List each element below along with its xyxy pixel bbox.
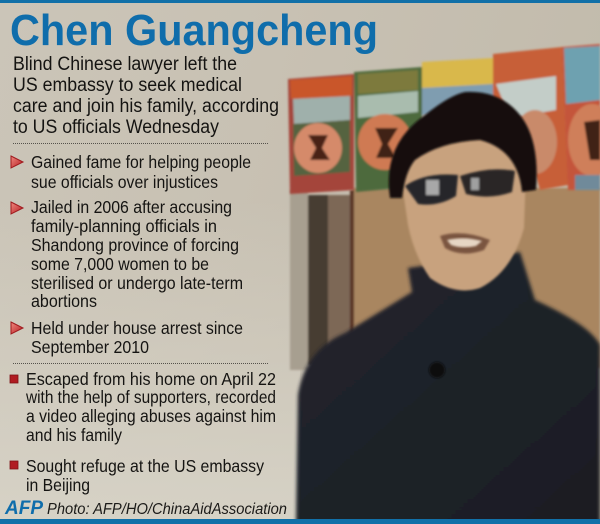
bullet: refuge: Sought refuge at the US embassy [26, 456, 264, 476]
intro text [13, 54, 279, 138]
bullet: jailed: Shandong province of forcing [31, 235, 239, 255]
bullet: refuge: in Beijing [26, 475, 90, 495]
face [400, 130, 526, 290]
bullet: escape: with the help of supporters, recorded [25, 387, 276, 407]
intro text: Blind Chinese lawyer left the [13, 54, 237, 75]
mouth and moustache [440, 233, 490, 254]
photo: Chen Guangcheng [288, 44, 600, 524]
jacket button [429, 362, 445, 378]
title: Chen Guangcheng [10, 6, 378, 55]
bullet: jailed: sterilised or undergo late-term [31, 273, 243, 293]
top blue bar [0, 0, 600, 3]
bullet: escape: and his family [26, 425, 122, 445]
bullet: fame: sue officials over injustices [31, 172, 218, 192]
jacket [296, 252, 600, 524]
sunglasses [405, 169, 515, 205]
bullet: jailed: family-planning officials in [31, 216, 217, 236]
bullet: escape: Escaped from his home on April 22 [26, 369, 276, 389]
bullet: fame [11, 152, 251, 192]
bullet: jailed: abortions [31, 291, 97, 311]
bullet: house arrest: Held under house arrest since [31, 318, 243, 338]
bullet: jailed: some 7,000 women to be [31, 254, 209, 274]
brown lower wall [290, 188, 600, 370]
bullet: escape [10, 369, 276, 445]
bullet: house arrest: September 2010 [31, 337, 149, 357]
AFP logo: AFP [4, 498, 43, 519]
bullet: refuge [10, 456, 264, 495]
intro text: care and join his family, according [13, 96, 279, 117]
bottom blue bar [0, 519, 600, 524]
photo credit: Photo: AFP/HO/ChinaAidAssociation [47, 501, 287, 518]
intro text: to US officials Wednesday [13, 117, 219, 138]
bullet: jailed [11, 197, 243, 311]
bullet: house arrest [11, 318, 243, 357]
bullet: fame: Gained fame for helping people [31, 152, 251, 172]
wall posters [288, 44, 600, 194]
hair [389, 92, 537, 198]
bullet: escape: a video alleging abuses against him [26, 406, 276, 426]
bullet: jailed: Jailed in 2006 after accusing [31, 197, 232, 217]
intro text: US embassy to seek medical [13, 75, 242, 96]
